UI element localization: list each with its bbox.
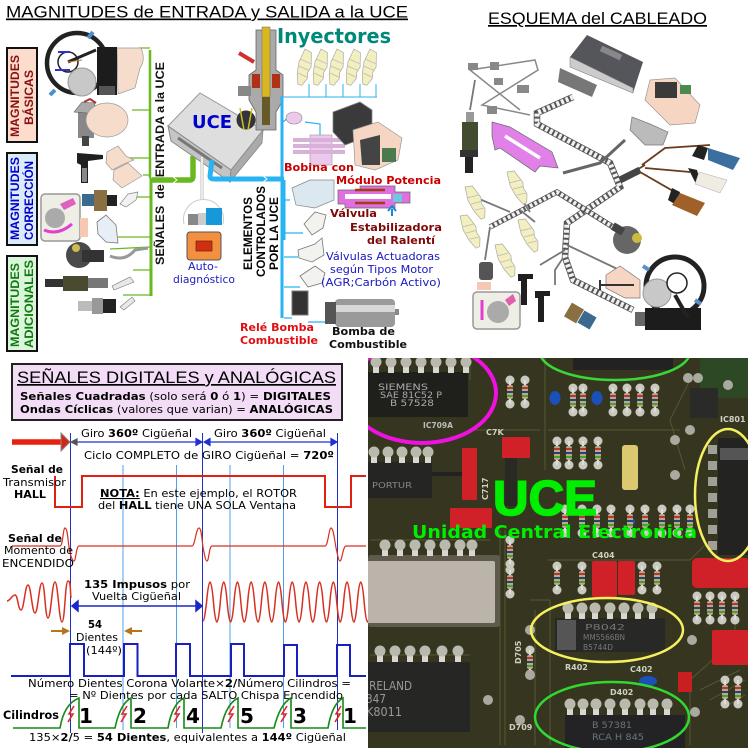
panel: magnitudes adicionales: ADICIONALES [22,260,36,348]
label: inyectores: Inyectores [277,24,391,48]
label: 135 impulsos [84,578,191,603]
label: autodiagnostico: diagnóstico [173,273,235,286]
ic: lm2901 [708,438,750,555]
label: unidad central electronica: Unidad Central Electrónica [412,523,697,543]
chart: hall square signal [55,476,366,507]
label: valvula estabilizadora del ralenti: Válvula [330,207,377,220]
ic: ireland: K8011 [366,705,402,719]
ic: siemens: SAE 81C52 P [380,391,443,401]
ic: mm5566: B5744D [583,643,613,652]
ic: rca: B 57381 [592,721,632,731]
icon: idle valve [292,180,410,216]
icon: cylinder box [473,262,520,329]
icon: distributor [74,99,128,146]
capacitor yellow [622,445,638,490]
label: cilindros: Cilindros [3,708,59,722]
label: senal transmisor hall: Señal de [11,463,63,476]
label: senal momento encendido: Señal de [8,532,62,545]
board traces [370,355,745,745]
firing order digits: 2 [133,704,147,728]
icon: sensor black [77,153,103,183]
icon: actuator valves [298,212,326,287]
firing order digits: 1 [343,704,357,728]
label: modulo potencia: Módulo Potencia [336,174,441,187]
label: formula: = Nº Dientes por cada SALTO Chispa Encendido [69,689,343,702]
icon: top connectors [468,62,529,114]
firing order digits: 3 [293,704,307,728]
label: giro 360 left: Giro 360º Cigüeñal [81,427,192,440]
label: senal transmisor hall: HALL [14,488,46,501]
label: bomba de combustible: Bomba de [332,325,395,338]
chart: cylinder firing signal [13,698,366,728]
ic: siemens: IC709A [423,421,454,430]
note: del HALL tiene UNA SOLA Ventana [98,499,296,512]
icon: harness flow meter [635,257,704,330]
ic: mm5566: P8042 [585,623,625,632]
icons: coloured connectors [668,145,740,216]
label: elementos controlados por la uce: ELEMENTOS [241,197,255,270]
label: uce: UCE [192,112,232,133]
capacitors red [450,437,750,692]
label: autodiagnostico: Auto- [188,260,218,273]
label: calculation: 135×2/5 = 54 Dientes , equivalentes a 144º Cigüeñal [29,731,346,744]
silkscreen labels: D705 [514,640,523,664]
icon: oxygen sensor [460,112,478,173]
highlight: magenta ellipse [368,358,498,445]
label: rele bomba combustible: Relé Bomba [240,321,314,334]
icon: plastic sensor [97,215,118,243]
panel: magnitudes adicionales [7,256,37,351]
icons: harness injectors [457,168,542,279]
silkscreen labels: C7K [486,428,504,437]
ic: mm5566: MM5566BN [583,633,625,642]
icon: temperature sensor [564,303,597,330]
icon: pressure switch [78,297,135,314]
highlight: green top ellipse [540,358,690,382]
crystal package [366,540,500,627]
silkscreen labels: C717 [481,477,490,500]
arrows: tooth span [51,627,142,635]
highlight: yellow chip ellipse [531,598,683,662]
ic: ireland: IRELAND [366,679,412,693]
vertical reference lines [70,433,338,733]
ic: top partial [573,358,673,370]
arrow: 135 impulses span [72,601,202,611]
label: valvula estabilizadora del ralenti: Estabilizadora [350,221,442,234]
icon: fuel pump relay [292,291,308,315]
label: valvulas actuadoras: Válvulas Actuadoras [326,250,440,263]
panel: magnitudes correccion: CORRECCIÓN [21,161,36,240]
cyclic wave definition: Ondas Cíclicas (valores que varian) = ANALÓGICAS [20,403,333,416]
label: ciclo completo: Ciclo COMPLETO de GIRO Cigüeñal = 720º [84,449,334,462]
firing order digits: 5 [240,704,254,728]
icon: power module [333,102,402,170]
ic: siemens: SIEMENS [378,383,428,393]
blue capacitors [550,391,657,686]
panel: magnitudes basicas: BÁSICAS [21,70,36,125]
label: elementos controlados por la uce [241,186,281,277]
output actuators [240,102,444,351]
title: esquema del cableado: ESQUEMA del CABLEADO [488,9,707,28]
white valve slot [505,136,540,158]
icon: correction box [41,194,88,241]
silkscreen labels: D402 [610,688,633,697]
silkscreen labels: D709 [509,723,533,732]
ic: rca [564,698,685,750]
panel: wiring diagram [457,35,740,330]
note: NOTA: En este ejemplo, el ROTOR [100,487,297,500]
label: valvulas actuadoras: (AGR;Carbón Activo) [321,276,441,289]
label: 54 dientes: Dientes [76,631,118,644]
ic: ireland: 347 [366,692,386,706]
panel: magnitudes basicas: MAGNITUDES [8,55,22,137]
icon: knock sensor [611,223,642,254]
label: 54 dientes: (144º) [86,644,122,657]
input signal green wiring [110,48,193,296]
silkscreen labels: C404 [592,551,615,560]
autodiagnostic wiring and icon [184,157,223,260]
panel: magnitudes correccion: MAGNITUDES [8,157,22,240]
square wave definition: Señales Cuadradas (solo será 0 ó 1) = DIGITALES [20,390,331,403]
label: senal momento encendido: Momento de [4,544,73,557]
label: bomba de combustible: Combustible [329,338,407,351]
icon: battery [600,266,640,298]
icon: oxygen sensor [45,276,134,291]
silkscreen labels: R402 [565,663,588,672]
input sensors [41,32,148,314]
chart: ignition signal [12,528,366,561]
firing order digits: 4 [186,704,200,728]
ic: siemens [368,356,472,430]
panel: circuit board photo [368,358,748,748]
ic: rca: RCA H 845 [592,733,644,743]
arrows: crankshaft turns [71,438,337,446]
icon: ignition coil [286,112,345,165]
label: 135 impulsos: Vuelta Cigüeñal [92,590,181,603]
label: senales de entrada a la uce: SEÑALES de ENTRADA a la UCE [152,62,167,265]
chart: inductive analog wave [7,581,371,622]
arrow: start marker [12,433,70,451]
icon: uce module [168,93,263,182]
label: valvula estabilizadora del ralenti: del Ralentí [367,234,436,247]
note [98,487,297,512]
label: senal transmisor hall: Transmisor [2,476,66,489]
panel: digital analog heading [12,364,342,420]
ic: portuguese [368,446,472,498]
panel: magnitudes basicas [7,48,37,142]
label: senal momento encendido: ENCENDIDO [2,557,74,570]
panel: magnitudes correccion [7,153,37,245]
icons: five injectors [294,48,380,86]
wiring harness [470,60,710,310]
firing order digits [79,704,357,728]
icon: pink valve [492,122,558,172]
icon: fuel pump [325,299,399,327]
label: formula: Número Dientes Corona Volante× 2/Número Cilindros = [28,677,351,690]
label: elementos controlados por la uce: CONTROLADOS [254,186,268,277]
icon: peach connectors [106,146,142,188]
icon: temperature sensor [82,190,138,211]
highlight: yellow right ellipse [695,429,750,561]
icon: knock sensor [66,242,148,268]
icons: black sensors [518,274,550,322]
icon: flow meter ring [47,32,143,96]
label: 135 impulsos: 135 Impusos por [84,578,191,591]
panel: magnitudes adicionales: MAGNITUDES [8,263,22,347]
label: uce large: UCE [493,472,597,526]
diode black [505,458,517,506]
icon: ecu [558,35,643,97]
chart: crank square wave [11,644,366,676]
small ic [690,388,718,418]
resistors [506,376,742,708]
title: magnitudes de entrada y salida: MAGNITUDES de ENTRADA y SALIDA a la UCE [6,2,408,22]
label: elementos controlados por la uce: POR LA UCE [267,197,281,270]
silkscreen labels: C402 [630,665,653,674]
icon: engine warning [187,232,221,260]
label: valvulas actuadoras: según Tipos Motor [330,263,433,276]
silkscreen labels [481,415,746,732]
label: giro 360 right: Giro 360º Cigüeñal [214,427,326,440]
label: 54 dientes: 54 [88,618,102,631]
top row pads [483,373,733,725]
ic: ireland [366,646,470,732]
silkscreen labels: IC801 [720,415,746,424]
icon: injector cutaway [236,27,283,130]
firing order digits: 1 [79,704,93,728]
output signal blue wiring [210,84,377,322]
heading: SEÑALES DIGITALES y ANALÓGICAS [17,368,336,387]
lightning sparks [68,706,341,722]
label: bobina con: Bobina con [284,161,354,174]
label: formula [28,677,351,702]
ic: mm5566 [555,602,665,652]
highlight: green bottom ellipse [535,682,689,750]
ic: portuguese: PORTUR [372,481,413,490]
label: valvula estabilizadora del ralenti [330,207,442,247]
green corner [700,358,750,398]
icon: power module [630,78,700,145]
label: rele bomba combustible: Combustible [240,334,318,347]
ic: siemens: B 57528 [390,399,434,409]
